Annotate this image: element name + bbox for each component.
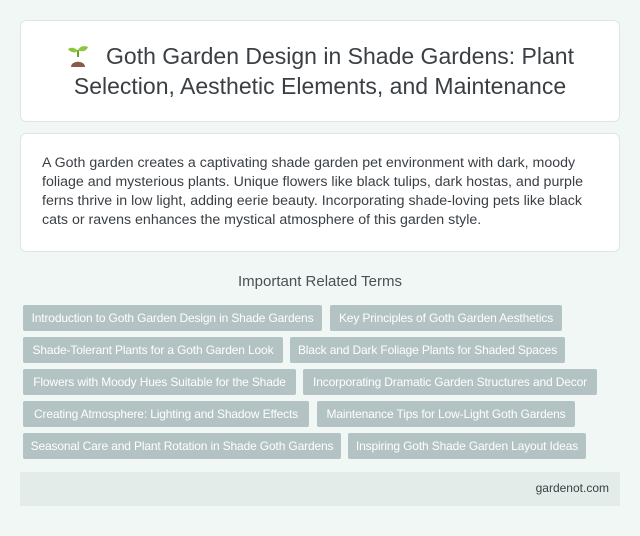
tag 5: Flowers with Moody Hues Suitable for the Shade bbox=[33, 375, 286, 389]
tag 8: Maintenance Tips for Low-Light Goth Gardens bbox=[326, 407, 566, 421]
title card bbox=[20, 20, 620, 122]
tag 4: Black and Dark Foliage Plants for Shaded Spaces bbox=[298, 343, 557, 357]
tag 3 bbox=[23, 337, 283, 363]
description text: A Goth garden creates a captivating shade garden pet environment with dark, moody foliage and mysterious plants. Unique flowers like black tulips, dark hostas, and purple ferns thrive in low light, adding eerie beauty. Incorporating shade-loving pets like black cats or ravens enhances the mystical atmosphere of this garden style. bbox=[42, 155, 583, 228]
icon: seedling bbox=[68, 46, 88, 67]
tag 6: Incorporating Dramatic Garden Structures and Decor bbox=[313, 375, 587, 389]
tag 9 bbox=[23, 433, 341, 459]
tag 2: Key Principles of Goth Garden Aesthetics bbox=[339, 311, 553, 325]
tag 7 bbox=[23, 401, 309, 427]
heading: important related terms: Important Related Terms bbox=[238, 273, 402, 290]
tag 3: Shade-Tolerant Plants for a Goth Garden Look bbox=[33, 343, 273, 357]
tag 9: Seasonal Care and Plant Rotation in Shade Goth Gardens bbox=[31, 439, 333, 453]
footer bbox=[20, 472, 620, 506]
tag 10: Inspiring Goth Shade Garden Layout Ideas bbox=[356, 439, 578, 453]
tag 2 bbox=[330, 305, 562, 331]
tag 8 bbox=[317, 401, 575, 427]
tag 6 bbox=[303, 369, 597, 395]
tag 5 bbox=[23, 369, 296, 395]
tag 10 bbox=[348, 433, 586, 459]
tag 4 bbox=[290, 337, 565, 363]
tag 1: Introduction to Goth Garden Design in Shade Gardens bbox=[32, 311, 313, 325]
description card bbox=[20, 133, 620, 252]
title: Goth Garden Design in Shade Gardens: Plant Selection, Aesthetic Elements, and Maintenance bbox=[74, 43, 574, 99]
tag 7: Creating Atmosphere: Lighting and Shadow Effects bbox=[34, 407, 298, 421]
footer source text: gardenot.com bbox=[536, 481, 609, 495]
tag 1 bbox=[23, 305, 322, 331]
